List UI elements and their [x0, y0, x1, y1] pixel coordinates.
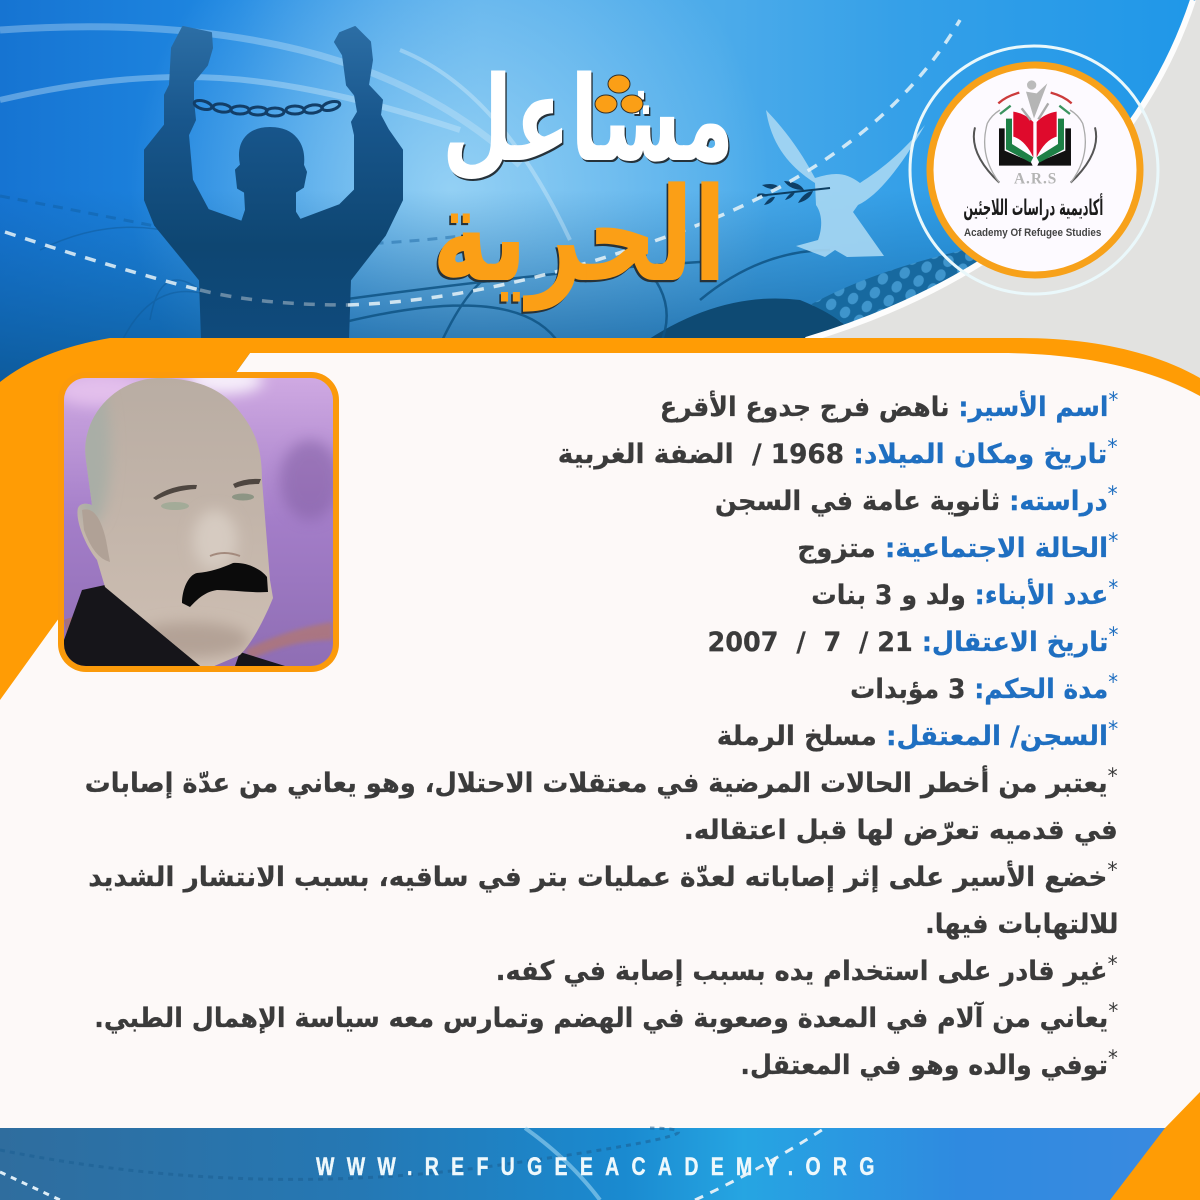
orange sweep: [0, 338, 1200, 700]
icon: dove with olive branch: [757, 110, 925, 257]
header photo banner: [0, 0, 1200, 400]
icon: book emblem: [974, 80, 1096, 183]
gray corner: [780, 0, 1200, 400]
field: arrest date: *تاريخ الاعتقال: 21 / 7 / 2007: [707, 623, 1118, 658]
logo badge: [910, 46, 1158, 294]
footer website: WWW.REFUGEEACADEMY.ORG: [316, 1153, 874, 1181]
note: amputations line 1: *خضع الأسير على إثر إصاباته لعدّة عمليات بتر في ساقيه، بسبب الانتشار الشديد: [89, 858, 1118, 893]
title: orange dots: [594, 74, 644, 114]
title: white word: مشاعل: [442, 50, 734, 188]
note: father died: *توفي والده وهو في المعتقل.: [741, 1046, 1118, 1081]
note: amputations line 2: للالتهابات فيها.: [924, 909, 1118, 940]
white panel: [0, 353, 1200, 1128]
title: orange word: الحرية: [432, 159, 726, 311]
prisoner details text: [85, 388, 1118, 1081]
field: name: *اسم الأسير: ناهض فرج جدوع الأقرع: [660, 388, 1118, 423]
note: stomach pain: *يعاني من آلام في المعدة وصعوبة في الهضم وتمارس معه سياسة الإهمال الطبي.: [94, 999, 1118, 1034]
portrait photo: [55, 366, 340, 672]
dashed line: [5, 20, 960, 305]
white arc: [806, 0, 1193, 340]
note: hand injury: *غير قادر على استخدام يده بسبب إصابة في كفه.: [496, 952, 1118, 987]
icon: prisoner silhouette with chained fists: [145, 27, 402, 340]
barbed fence: [0, 196, 1040, 345]
field: sentence: *مدة الحكم: 3 مؤبدات: [850, 670, 1118, 705]
logo english name: Academy Of Refugee Studies: [964, 227, 1101, 239]
field: marital status: *الحالة الاجتماعية: متزوج: [797, 529, 1118, 564]
footer band: [0, 1128, 1200, 1200]
orange corner triangle: [1110, 1092, 1200, 1200]
note: condition line 2: في قدميه تعرّض لها قبل اعتقاله.: [684, 815, 1118, 846]
field: birth: *تاريخ ومكان الميلاد: 1968 / الضفة الغربية: [558, 435, 1118, 470]
field: prison: *السجن/ المعتقل: مسلخ الرملة: [716, 717, 1118, 752]
field: children: *عدد الأبناء: ولد و 3 بنات: [811, 576, 1118, 611]
field: education: *دراسته: ثانوية عامة في السجن: [715, 482, 1118, 517]
note: condition line 1: *يعتبر من أخطر الحالات المرضية في معتقلات الاحتلال، وهو يعاني من عدّة إصابات: [85, 764, 1118, 799]
logo A.R.S: A.R.S: [1014, 170, 1057, 187]
